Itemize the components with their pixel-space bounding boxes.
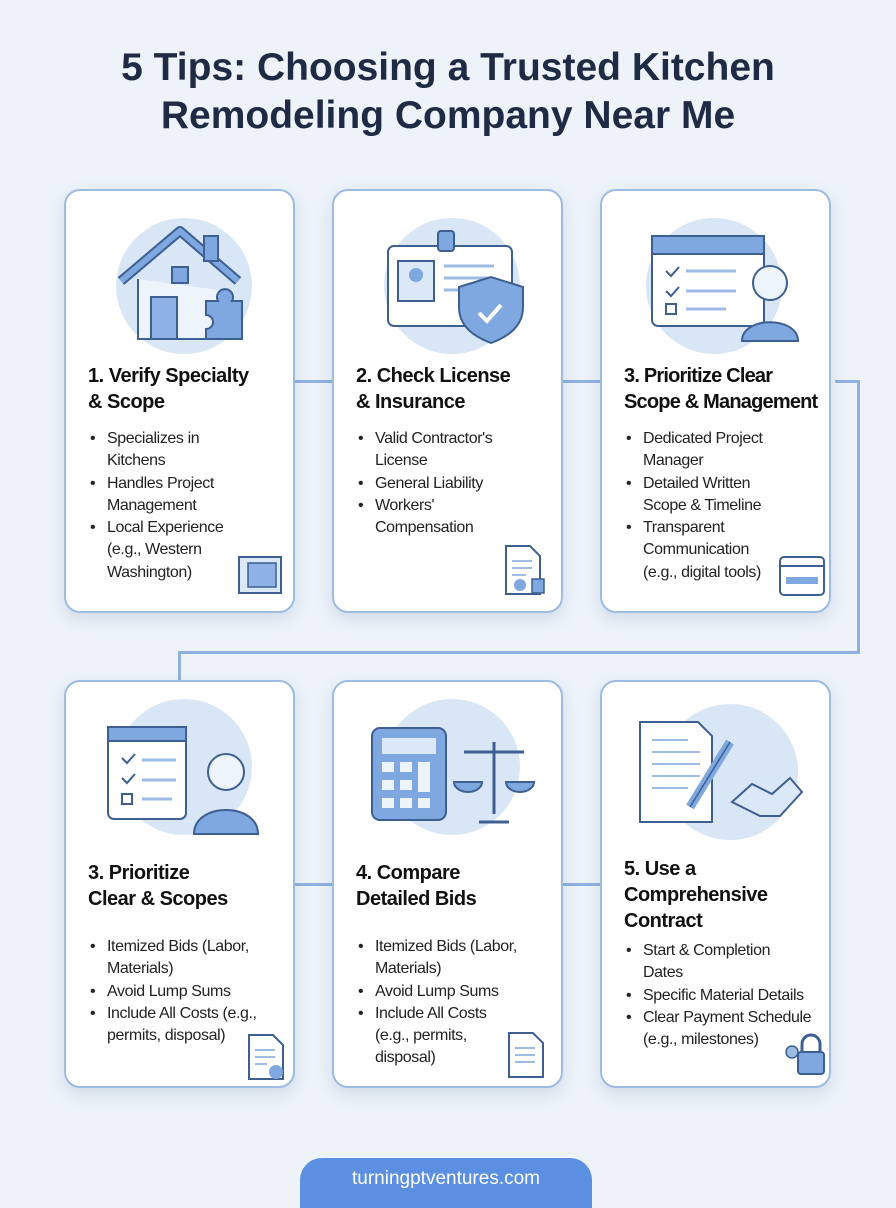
panel: card 4 (row 2, left): 3. Prioritize bbox=[88, 862, 189, 884]
icon: id card with shield bbox=[384, 218, 524, 354]
panel: card 3 bbox=[600, 189, 831, 613]
panel: card 5: Itemized Bids (Labor, bbox=[375, 938, 517, 955]
panel: card 6: Dates bbox=[643, 964, 683, 981]
footer: website: turningptventures.com bbox=[352, 1168, 540, 1189]
title: Remodeling Company Near Me bbox=[161, 94, 735, 137]
panel: card 6: 5. Use a bbox=[624, 858, 696, 880]
panel: card 3: Transparent bbox=[643, 519, 724, 536]
title bbox=[121, 46, 775, 137]
icon: calendar with support agent bbox=[646, 218, 799, 354]
panel: card 3: (e.g., digital tools) bbox=[643, 564, 761, 581]
bullets: Local Experience bbox=[107, 519, 223, 536]
panel: card 2: General Liability bbox=[375, 475, 483, 492]
connector lines bbox=[124, 190, 860, 1087]
panel: card 6: Start & Completion bbox=[643, 942, 770, 959]
icon: document list bbox=[508, 1032, 544, 1078]
panel: card 3: Manager bbox=[643, 452, 703, 469]
panel: card 6: (e.g., milestones) bbox=[643, 1031, 759, 1048]
panel: card 3: Communication bbox=[643, 541, 749, 558]
bullets: Management bbox=[107, 497, 196, 514]
panel: card 6: Contract bbox=[624, 910, 702, 932]
panel: card 5: Include All Costs bbox=[375, 1005, 486, 1022]
bullets: Specializes in bbox=[107, 430, 199, 447]
panel: card 4 (row 2, left): permits, disposal) bbox=[107, 1027, 225, 1044]
panel: card 4 (row 2, left): Itemized Bids (Labor, bbox=[107, 938, 249, 955]
panel: card 5: Materials) bbox=[375, 960, 441, 977]
panel: card 2: Compensation bbox=[375, 519, 473, 536]
icon: browser window bbox=[779, 556, 825, 596]
panel: card 1: & Scope bbox=[88, 391, 165, 413]
panel: card 4 (row 2, left) bbox=[64, 680, 295, 1088]
icon: padlock key bbox=[785, 1034, 825, 1075]
panel: card 5 bbox=[332, 680, 563, 1088]
panel: card 5: Detailed Bids bbox=[356, 888, 476, 910]
icon: checklist with person bbox=[107, 699, 259, 835]
bullets bbox=[90, 430, 224, 581]
panel: card 6 bbox=[600, 680, 831, 1088]
footer: website bbox=[300, 1158, 592, 1208]
icon: document check bbox=[248, 1034, 284, 1080]
icon: blueprint bbox=[238, 556, 282, 594]
panel: card 2: License bbox=[375, 452, 427, 469]
panel: card 2: 2. Check License bbox=[356, 365, 510, 387]
panel: card 4 (row 2, left): Materials) bbox=[107, 960, 173, 977]
panel: card 5: (e.g., permits, bbox=[375, 1027, 467, 1044]
panel: card 3: 3. Prioritize Clear bbox=[624, 365, 772, 387]
panel: card 2: Valid Contractor's bbox=[375, 430, 492, 447]
bullets: (e.g., Western bbox=[107, 541, 202, 558]
icon: house with puzzle bbox=[116, 218, 252, 354]
panel: card 4 (row 2, left): Clear & Scopes bbox=[88, 888, 228, 910]
icon: contract and handshake bbox=[639, 704, 804, 840]
panel: card 3: Scope & Management bbox=[624, 391, 817, 413]
panel: card 2: & Insurance bbox=[356, 391, 465, 413]
panel: card 4 (row 2, left): Include All Costs (e.g., bbox=[107, 1005, 257, 1022]
panel: card 1: 1. Verify Specialty bbox=[88, 365, 249, 387]
panel: card 6: Clear Payment Schedule bbox=[643, 1009, 811, 1026]
panel: card 5: disposal) bbox=[375, 1049, 435, 1066]
panel: card 6: Specific Material Details bbox=[643, 987, 804, 1004]
panel: card 1 bbox=[64, 189, 295, 613]
panel: card 3: Detailed Written bbox=[643, 475, 750, 492]
bullets: Kitchens bbox=[107, 452, 165, 469]
panel: card 5: Avoid Lump Sums bbox=[375, 983, 499, 1000]
panel: card 5: 4. Compare bbox=[356, 862, 460, 884]
panel: card 2: Workers' bbox=[375, 497, 434, 514]
panel: card 3: Scope & Timeline bbox=[643, 497, 761, 514]
bullets: Washington) bbox=[107, 564, 192, 581]
panel: card 2 bbox=[332, 189, 563, 613]
panel: card 6: Comprehensive bbox=[624, 884, 768, 906]
bullets: Handles Project bbox=[107, 475, 214, 492]
title: 5 Tips: Choosing a Trusted Kitchen bbox=[121, 46, 775, 89]
icon: calculator and scale bbox=[371, 699, 535, 835]
panel: card 4 (row 2, left): Avoid Lump Sums bbox=[107, 983, 231, 1000]
icon: document with stamp bbox=[505, 545, 545, 595]
panel: card 3: Dedicated Project bbox=[643, 430, 762, 447]
